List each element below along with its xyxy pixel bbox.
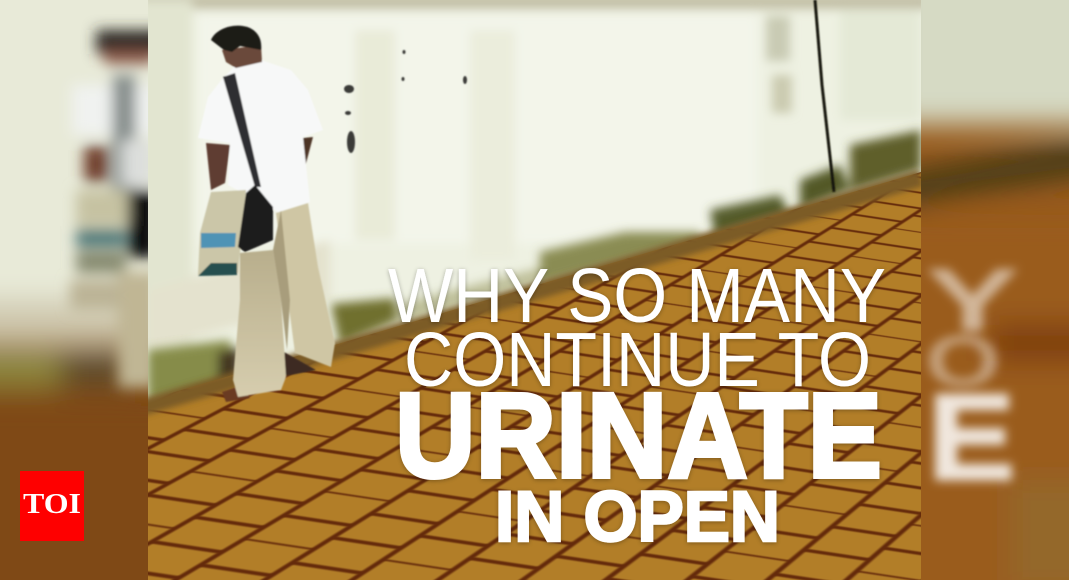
shirt <box>198 60 323 212</box>
black bag pouch <box>238 185 273 252</box>
blurred title letters <box>925 251 1020 505</box>
head <box>222 45 262 68</box>
blurred title letters: O <box>925 322 1001 402</box>
brick pavement <box>148 172 921 580</box>
title line 3: URINATE <box>395 367 882 503</box>
bag strap <box>223 73 261 187</box>
wall weathering patches <box>148 0 921 359</box>
panel: blurred left background <box>0 0 148 580</box>
canvas bag <box>198 190 246 275</box>
logo: TOI: TOI <box>23 488 81 520</box>
title line 1: WHY SO MANY <box>388 253 886 339</box>
wall stain marks <box>344 50 467 153</box>
arms <box>206 143 230 190</box>
moss along wall base <box>148 130 921 402</box>
man facing the wall <box>198 26 335 402</box>
blurred title letters: Y <box>925 251 1020 351</box>
photo: white stained wall <box>140 0 930 410</box>
logo: TOI <box>20 471 84 541</box>
panel: blurred right background <box>921 0 1069 580</box>
wall crack <box>815 0 834 192</box>
dirt strip along wall base <box>140 178 921 408</box>
title <box>388 253 886 557</box>
legs <box>276 203 335 367</box>
title line 2: CONTINUE TO <box>404 317 871 403</box>
shoe and shadow <box>284 352 316 376</box>
title line 4: IN OPEN <box>495 478 780 557</box>
blurred title letters: E <box>928 369 1015 505</box>
